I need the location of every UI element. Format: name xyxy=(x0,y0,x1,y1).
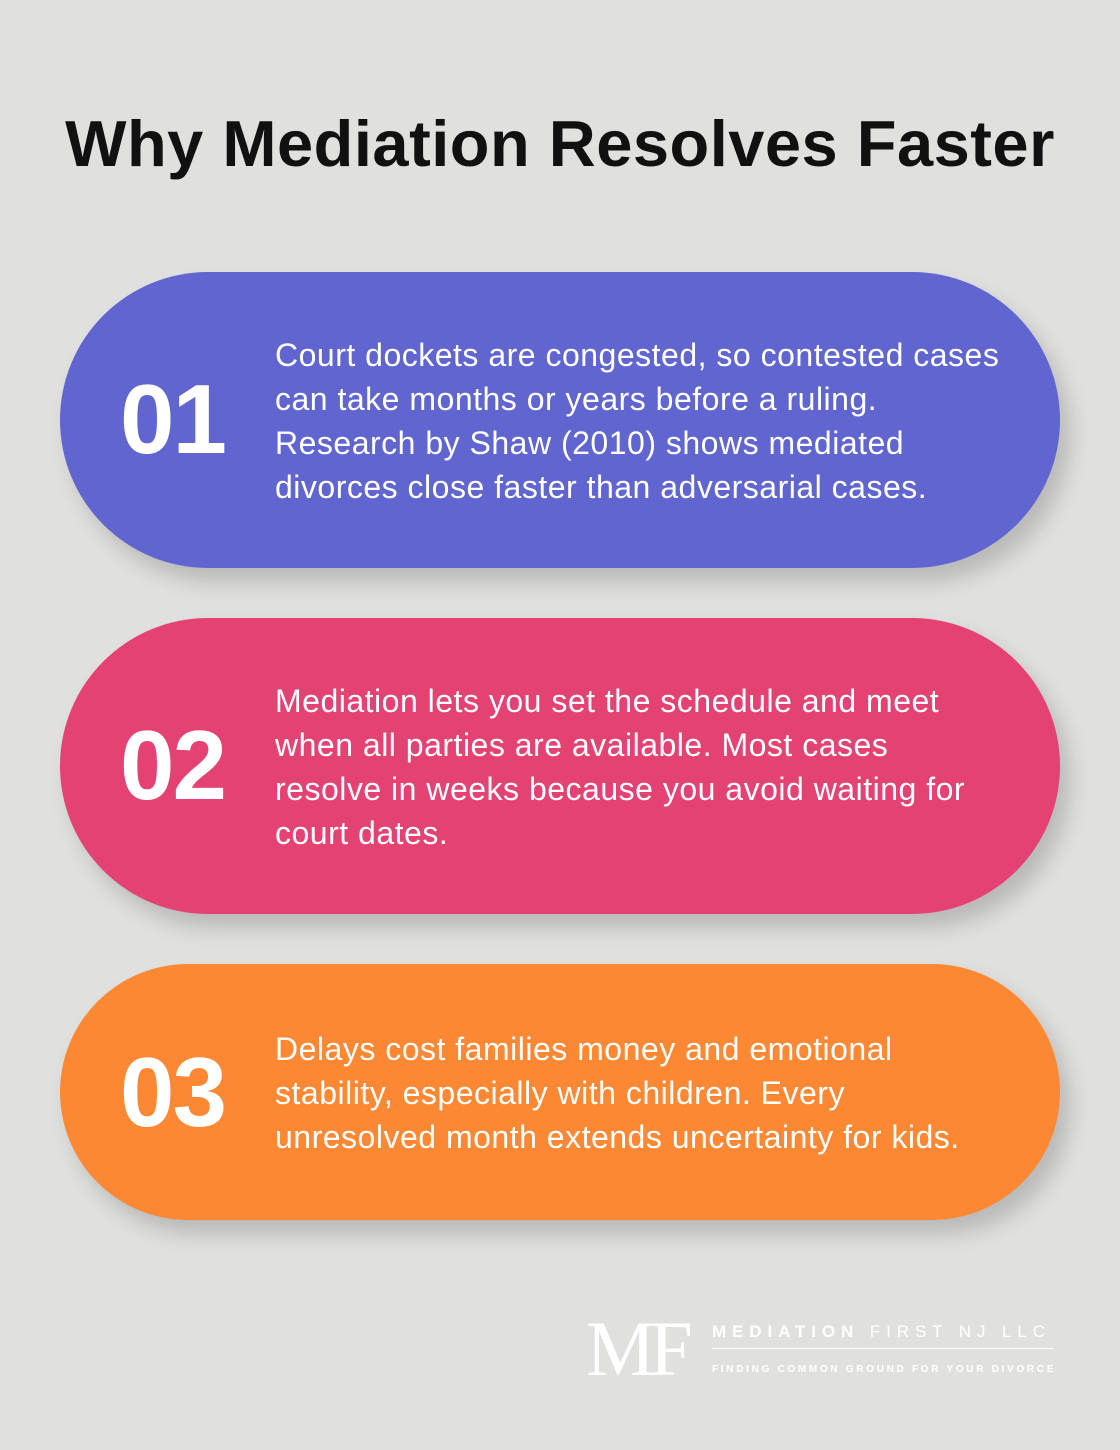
text 02: Mediation lets you set the schedule and meet xyxy=(275,683,939,719)
text 03: unresolved month extends uncertainty for kids. xyxy=(275,1119,960,1155)
logo mark: MF xyxy=(586,1305,687,1392)
text 01: Research by Shaw (2010) shows mediated xyxy=(275,425,904,461)
text 03: stability, especially with children. Every xyxy=(275,1075,845,1111)
text 03 xyxy=(275,1031,960,1155)
panel: 03 xyxy=(60,964,1060,1220)
number 02: 02 xyxy=(120,710,225,820)
panel: 02 xyxy=(60,618,1060,914)
logo name: MEDIATION FIRST NJ LLC xyxy=(712,1322,1051,1341)
panel: 01 xyxy=(60,272,1060,568)
text 01: can take months or years before a ruling. xyxy=(275,381,877,417)
number 03: 03 xyxy=(120,1037,225,1147)
text 02: when all parties are available. Most cases xyxy=(275,727,888,763)
text 03: Delays cost families money and emotional xyxy=(275,1031,893,1067)
number 01: 01 xyxy=(120,364,225,474)
text 01: divorces close faster than adversarial cases. xyxy=(275,469,927,505)
text 02: court dates. xyxy=(275,815,448,851)
text 02 xyxy=(275,683,965,851)
logo xyxy=(586,1305,1056,1392)
text 01 xyxy=(275,337,999,505)
logo tagline: FINDING COMMON GROUND FOR YOUR DIVORCE xyxy=(712,1364,1056,1375)
text 01: Court dockets are congested, so contested cases xyxy=(275,337,999,373)
title: Why Mediation Resolves Faster xyxy=(65,107,1055,180)
text 02: resolve in weeks because you avoid waiting for xyxy=(275,771,965,807)
